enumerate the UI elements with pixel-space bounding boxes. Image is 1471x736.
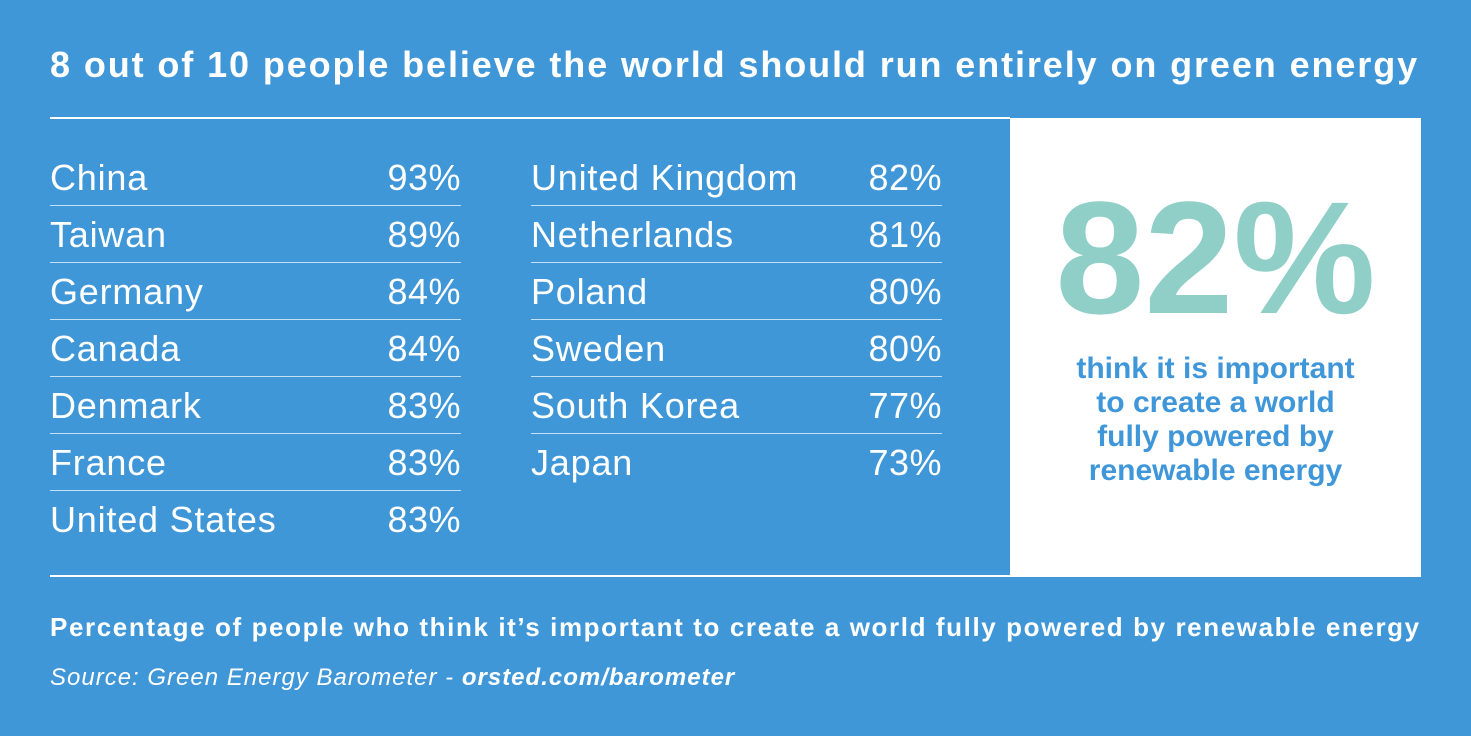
highlight caption: fully powered by	[1097, 420, 1334, 453]
row Poland: 80%	[868, 271, 942, 312]
row Taiwan: 89%	[387, 214, 461, 255]
row South Korea: 77%	[868, 385, 942, 426]
row Canada: Canada	[50, 328, 181, 369]
row Japan	[531, 442, 942, 483]
big number: 82%	[1055, 168, 1376, 347]
row South Korea: South Korea	[531, 385, 740, 426]
source: Source: Green Energy Barometer - orsted.com/barometer	[50, 664, 735, 691]
highlight caption: to create a world	[1096, 386, 1335, 419]
row Taiwan: Taiwan	[50, 214, 167, 255]
row Canada: 84%	[387, 328, 461, 369]
row France: 83%	[387, 442, 461, 483]
highlight caption: renewable energy	[1089, 454, 1342, 487]
row France: France	[50, 442, 167, 483]
row United States	[50, 499, 461, 540]
row UK: 82%	[868, 157, 942, 198]
row Sweden: 80%	[868, 328, 942, 369]
row United States: 83%	[387, 499, 461, 540]
row UK: United Kingdom	[531, 157, 798, 198]
row Taiwan	[50, 206, 461, 263]
row Germany	[50, 263, 461, 320]
highlight caption: think it is important	[1076, 352, 1355, 385]
row Denmark: Denmark	[50, 385, 202, 426]
row Canada	[50, 320, 461, 377]
row Netherlands: Netherlands	[531, 214, 734, 255]
row Poland	[531, 263, 942, 320]
row South Korea	[531, 377, 942, 434]
row United States: United States	[50, 499, 277, 540]
row Denmark	[50, 377, 461, 434]
row France	[50, 434, 461, 491]
row Poland: Poland	[531, 271, 648, 312]
row Germany: Germany	[50, 271, 204, 312]
row Japan: Japan	[531, 442, 633, 483]
row Germany: 84%	[387, 271, 461, 312]
row Japan: 73%	[868, 442, 942, 483]
panel: right column	[531, 157, 942, 483]
highlight caption	[1076, 352, 1355, 487]
footer caption: Percentage of people who think it’s important to create a world fully powered by renewable energy	[50, 612, 1421, 642]
row China: 93%	[387, 157, 461, 198]
row UK	[531, 149, 942, 206]
row Sweden: Sweden	[531, 328, 666, 369]
row Sweden	[531, 320, 942, 377]
row China	[50, 149, 461, 206]
panel: left column	[50, 157, 461, 540]
row China: China	[50, 157, 148, 198]
row Denmark: 83%	[387, 385, 461, 426]
panel: highlight box	[1010, 118, 1421, 576]
title: 8 out of 10 people believe the world should run entirely on green energy	[50, 44, 1419, 85]
row Netherlands	[531, 206, 942, 263]
row Netherlands: 81%	[868, 214, 942, 255]
